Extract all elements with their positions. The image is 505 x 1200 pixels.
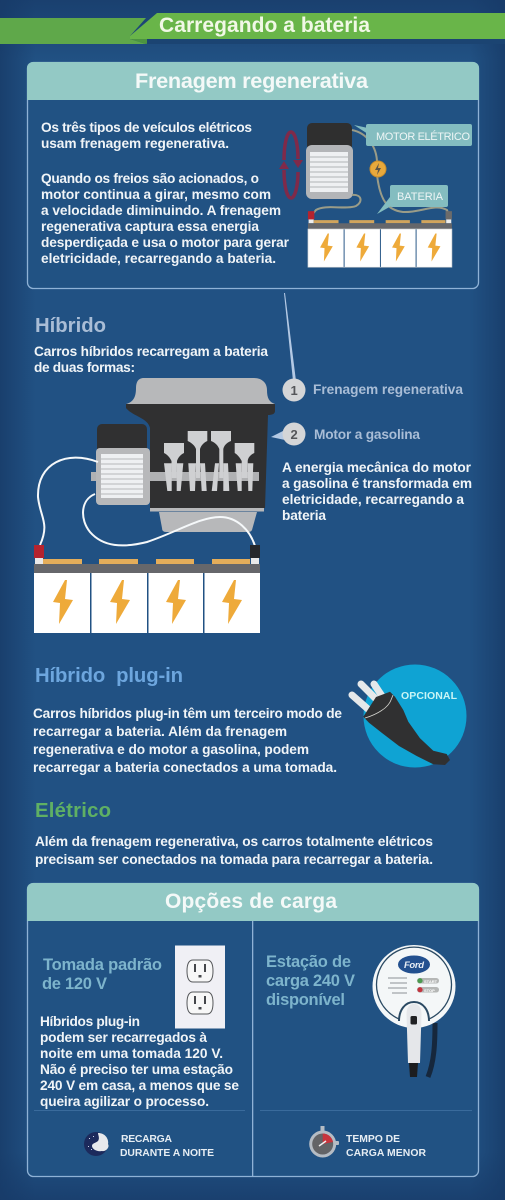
text block: híbrido intro: Carros híbridos recarregam a bateria — [34, 344, 268, 359]
heading: tomada padrão: Tomada padrão — [43, 956, 162, 974]
text block: híbrido plug-in: Carros híbridos plug-in têm um terceiro modo de — [33, 706, 342, 721]
text block: híbrido plug-in: recarregar a bateria. Além da frenagem — [33, 724, 287, 739]
heading: estação de carga: carga 240 V — [266, 972, 355, 990]
label: recarga durante a noite: DURANTE A NOITE — [120, 1148, 214, 1159]
text block: intro — [41, 120, 252, 151]
text block: híbrido plug-in: recarregar a bateria conectados a uma tomada. — [33, 760, 337, 775]
sub-element: shaft — [91, 472, 259, 481]
label: recarga durante a noite: RECARGA — [121, 1134, 172, 1145]
text block: energia mecânica — [282, 460, 472, 523]
icon: small electric motor — [306, 123, 353, 199]
item 1: frenagem regenerativa: Frenagem regenerativa — [313, 382, 463, 397]
text block: híbrido plug-in: regenerativa e do motor a gasolina, podem — [33, 742, 309, 757]
illustration: wires — [38, 458, 255, 546]
text block: híbrido intro: de duas formas: — [34, 360, 135, 375]
item 1: frenagem regenerativa — [282, 378, 463, 402]
panel heading: Frenagem regenerativa — [135, 68, 369, 93]
text block: híbridos plug-in — [40, 1014, 239, 1109]
item 2: motor a gasolina: Motor a gasolina — [314, 427, 420, 442]
icon: wall outlet — [175, 946, 225, 1028]
leader line from panel to item 1 — [284, 293, 296, 381]
title: Carregando a bateria — [159, 14, 370, 37]
callout: motor elétrico — [354, 124, 472, 146]
text block: elétrico: Além da frenagem regenerativa, os carros totalmente elétricos — [35, 834, 433, 849]
text block: energia mecânica: a gasolina é transformada em — [282, 476, 472, 491]
icon: charging station: STOP — [424, 988, 435, 993]
text block: energia mecânica: eletricidade, recarregando a — [282, 492, 464, 507]
illustration: large battery — [34, 545, 260, 633]
panel heading: Opções de carga — [165, 890, 337, 913]
heading: estação de carga — [266, 953, 355, 1009]
icon: stopwatch — [309, 1126, 339, 1158]
icon: charging station: START — [424, 979, 438, 984]
icon: charging station — [372, 945, 456, 1077]
text block: explanation: motor continua a girar, mesmo com — [41, 187, 271, 202]
text block: energia mecânica: A energia mecânica do motor — [282, 460, 472, 475]
heading: tomada padrão — [42, 956, 162, 993]
icon: rotation arrows — [279, 132, 303, 198]
callout: motor elétrico: MOTOR ELÉTRICO — [376, 130, 470, 143]
label: tempo de carga menor: TEMPO DE — [346, 1134, 400, 1145]
wires and charge symbol — [311, 130, 449, 216]
text block: híbridos plug-in: 240 V em casa, a menos que se — [40, 1078, 239, 1093]
heading: híbrido plug-in: Híbrido plug-in — [35, 665, 183, 687]
heading: estação de carga: Estação de — [266, 953, 351, 971]
heading: tomada padrão: de 120 V — [42, 975, 107, 993]
text block: explanation: Quando os freios são acionados, o — [41, 171, 259, 186]
panel: frenagem regenerativa — [27, 62, 479, 288]
Ford logo: Ford — [404, 960, 424, 971]
item 2: motor a gasolina: 2 — [290, 427, 298, 442]
sub-element: pistons — [164, 431, 254, 491]
heading: elétrico: Elétrico — [35, 800, 111, 822]
text block: elétrico — [35, 834, 433, 867]
text block: híbridos plug-in: Híbridos plug-in — [40, 1014, 140, 1029]
text block: intro: usam frenagem regenerativa. — [41, 136, 229, 151]
label: recarga durante a noite — [120, 1134, 214, 1159]
title banner — [0, 13, 505, 44]
text block: híbridos plug-in: Não é preciso ter uma estação — [40, 1062, 233, 1077]
icon: small battery — [308, 211, 452, 267]
text block: híbrido plug-in — [33, 706, 342, 775]
label: tempo de carga menor — [346, 1134, 426, 1159]
item 1: frenagem regenerativa: 1 — [290, 383, 298, 398]
text block: híbridos plug-in: queira agilizar o processo. — [40, 1094, 209, 1109]
panel: opções de carga — [27, 883, 479, 1177]
text block: híbridos plug-in: podem ser recarregados à — [40, 1030, 207, 1045]
icon: optional plug — [352, 664, 466, 768]
text block: explanation: a velocidade diminuindo. A frenagem — [41, 203, 281, 218]
text block: híbridos plug-in: noite em uma tomada 120 V. — [40, 1046, 223, 1061]
text block: híbrido intro — [34, 344, 268, 375]
text block: explanation: regenerativa captura essa energia — [41, 219, 259, 234]
icon: optional plug: OPCIONAL — [401, 690, 458, 702]
text block: explanation: desperdiçada e usa o motor para gerar — [41, 235, 290, 250]
heading: estação de carga: disponível — [266, 991, 345, 1009]
text block: explanation — [41, 171, 290, 266]
text block: explanation: eletricidade, recarregando a bateria. — [41, 251, 276, 266]
item 2: motor a gasolina — [271, 422, 420, 446]
sub-element: motor — [96, 424, 150, 505]
callout: bateria: BATERIA — [397, 191, 444, 203]
text block: elétrico: precisam ser conectados na tomada para recarregar a bateria. — [35, 852, 433, 867]
illustration: hybrid engine — [91, 378, 275, 532]
heading: híbrido: Híbrido — [35, 315, 106, 337]
callout: bateria — [377, 185, 448, 214]
text block: energia mecânica: bateria — [282, 508, 326, 523]
icon: moon and cloud — [84, 1132, 109, 1156]
label: tempo de carga menor: CARGA MENOR — [346, 1148, 426, 1159]
text block: intro: Os três tipos de veículos elétricos — [41, 120, 252, 135]
